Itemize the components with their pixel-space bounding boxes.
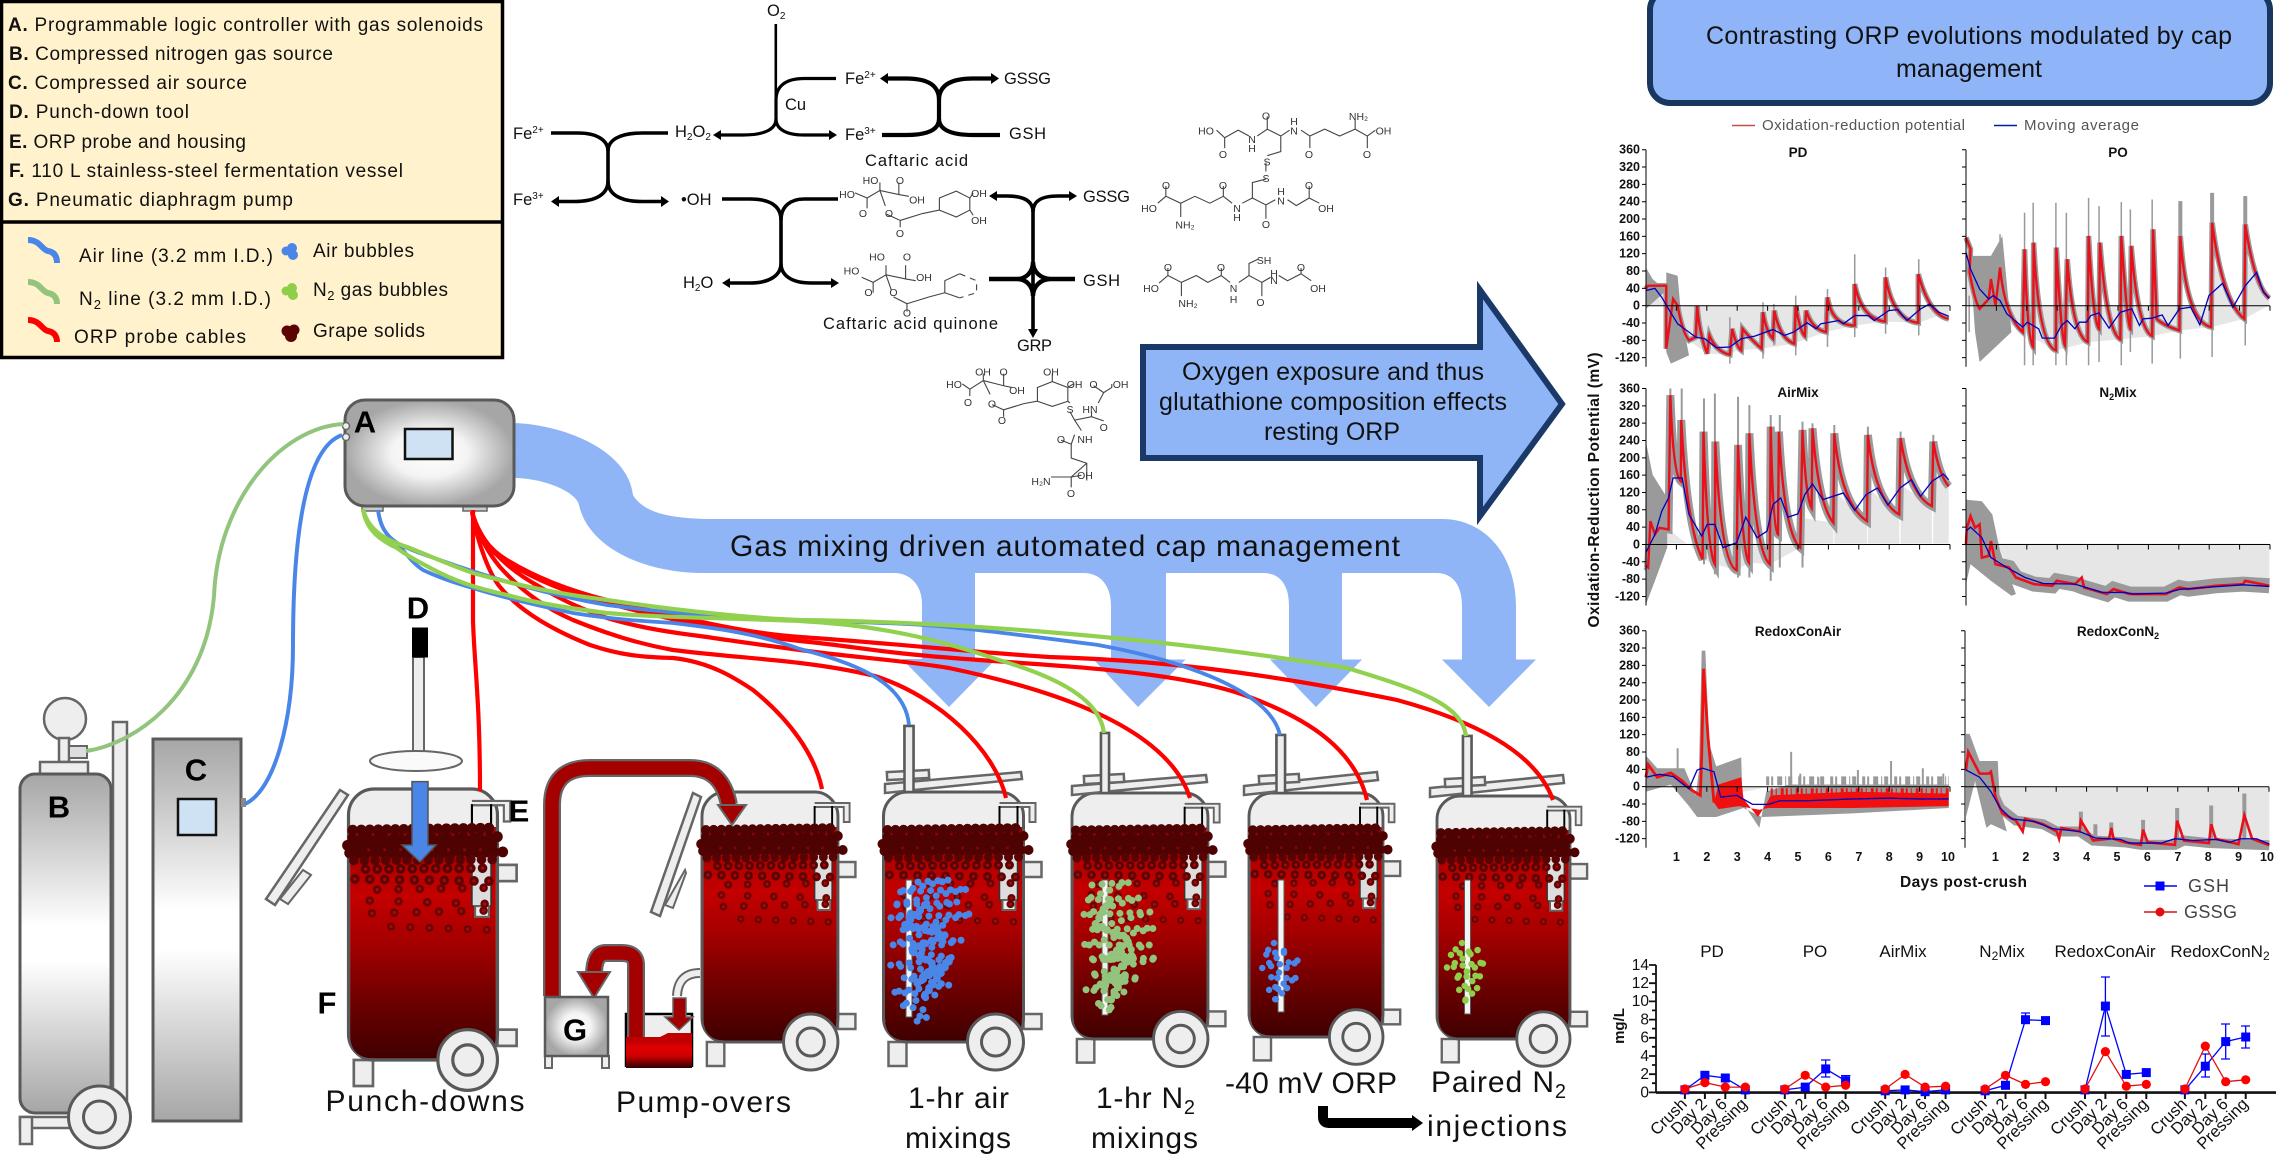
chart: RedoxConAir: 0 [1633, 780, 1640, 794]
panel: equipment key: F. 110 L stainless-steel fermentation vessel [9, 161, 403, 182]
label: 1-hr air mixings: mixings [905, 1122, 1011, 1155]
chart: RedoxConN2: 2 [2154, 631, 2159, 641]
chart: RedoxConAir: 40 [1626, 762, 1640, 776]
label: punch-downs: Punch-downs [326, 1085, 524, 1118]
panel: equipment key: B. Compressed nitrogen gas source [9, 44, 333, 65]
chart: N2Mix [1962, 385, 2270, 606]
chemistry: oxidation reaction scheme: Fe [513, 191, 532, 209]
chart: glutathione concentrations: 14 [1632, 957, 1649, 974]
molecule: grape reaction product GRP: OH [1009, 385, 1025, 397]
molecule: grape reaction product GRP: O [1089, 379, 1098, 391]
chart: N2Mix: N [2099, 385, 2109, 400]
label: -40 mV ORP: -40 mV ORP [1225, 1067, 1397, 1100]
molecule: grape reaction product GRP: O [1000, 367, 1008, 379]
chart: glutathione concentrations: Pressing [1794, 1095, 1852, 1153]
chart: RedoxConAir: 160 [1619, 710, 1640, 724]
molecule: glutathione disulfide GSSG: NH₂ [1175, 220, 1195, 232]
chart: glutathione concentrations: PO [1803, 942, 1827, 961]
molecule: caftaric acid quinone: O [903, 308, 911, 320]
chart: glutathione concentrations: Day 2 [1668, 1095, 1711, 1138]
chemistry: oxidation reaction scheme [513, 2, 1130, 355]
chemistry: oxidation reaction scheme: Caftaric acid quinone [823, 315, 998, 333]
chart: AirMix: 80 [1626, 503, 1640, 517]
molecule: grape reaction product GRP: HO [946, 379, 962, 391]
chart: glutathione concentrations: Day 6 [2089, 1095, 2132, 1138]
molecule: caftaric acid: HO [839, 189, 855, 201]
chart: RedoxConN2: 10 [2260, 850, 2274, 864]
chart: N2Mix: Mix [2114, 385, 2137, 400]
molecule: grape reaction product GRP: O [964, 397, 972, 409]
molecule: grape reaction product GRP: O [988, 399, 996, 411]
panel: equipment key: N [79, 289, 93, 310]
molecule: glutathione disulfide GSSG: S [1263, 157, 1271, 169]
chart: glutathione concentrations: mg/L [1611, 1008, 1628, 1044]
chemistry: oxidation reaction scheme: 2 [780, 11, 786, 22]
title: contrasting ORP evolutions: management [1896, 55, 2042, 83]
molecule: grape reaction product GRP: OH [1077, 470, 1093, 482]
molecule: caftaric acid: O [896, 228, 904, 240]
chart legend: GSH and GSSG: GSH [2188, 876, 2229, 896]
chemistry: oxidation reaction scheme: GSH [1083, 272, 1120, 290]
chart: PD: 240 [1619, 195, 1640, 209]
chemistry: oxidation reaction scheme: 3+ [864, 126, 876, 137]
molecule: grape reaction product GRP: HN [1082, 404, 1098, 416]
molecule: glutathione disulfide GSSG: O [1363, 149, 1371, 161]
molecule: reduced glutathione GSH: N [1270, 275, 1278, 287]
icon: punch-down tool D [370, 590, 462, 771]
arrow: oxygen exposure callout [1143, 290, 1562, 516]
chart: glutathione concentrations: Day 2 [1768, 1095, 1811, 1138]
chart: RedoxConAir: 240 [1619, 676, 1640, 690]
chemistry: oxidation reaction scheme: Fe [513, 125, 532, 143]
chart: glutathione concentrations: Pressing [1894, 1095, 1952, 1153]
chart: PD: 320 [1619, 160, 1640, 174]
chart: RedoxConN2: 9 [2235, 850, 2242, 864]
label: 1-hr air mixings: 1-hr air [908, 1082, 1009, 1115]
chart: RedoxConAir: 120 [1619, 728, 1640, 742]
molecule: caftaric acid quinone [844, 252, 977, 320]
label: 1-hr N2 mixings: mixings [1091, 1122, 1198, 1155]
chart: PO: PO [2108, 145, 2128, 160]
panel: equipment key: line (3.2 mm I.D.) [102, 289, 271, 310]
chart: PD: 120 [1619, 247, 1640, 261]
title: contrasting ORP evolutions [1650, 0, 2270, 103]
chart: glutathione concentrations: Day 6 [1888, 1095, 1931, 1138]
molecule: reduced glutathione GSH [1143, 255, 1326, 310]
chart: RedoxConAir: 9 [1916, 850, 1923, 864]
chart: glutathione concentrations: Pressing [2094, 1095, 2152, 1153]
chemistry: oxidation reaction scheme: 3+ [532, 191, 544, 202]
chart: RedoxConAir: 8 [1886, 850, 1893, 864]
chemistry: oxidation reaction scheme: Caftaric acid [865, 152, 968, 170]
molecule: glutathione disulfide GSSG: N [1290, 126, 1298, 138]
molecule: grape reaction product GRP: OH [975, 367, 991, 379]
vessel: pump-overs with pump G: G [563, 1012, 587, 1048]
arrow: oxygen exposure callout: resting ORP [1264, 418, 1400, 446]
chemistry: oxidation reaction scheme: 2 [687, 132, 693, 143]
chart: glutathione concentrations: 0 [1640, 1084, 1649, 1102]
chart: RedoxConAir: 5 [1795, 850, 1802, 864]
molecule: grape reaction product GRP [946, 367, 1128, 500]
chemistry: oxidation reaction scheme: Fe [845, 126, 864, 144]
chart: RedoxConAir: 3 [1734, 850, 1741, 864]
chart: PD: -40 [1622, 316, 1640, 330]
panel: equipment key: Air line (3.2 mm I.D.) [79, 246, 273, 267]
chemistry: oxidation reaction scheme: H [675, 123, 687, 141]
chart: RedoxConN2: 6 [2144, 850, 2151, 864]
chart: PD: 160 [1619, 229, 1640, 243]
molecule: grape reaction product GRP: OH [1113, 379, 1128, 391]
molecule: glutathione disulfide GSSG: O [1219, 149, 1227, 161]
molecule: glutathione disulfide GSSG: OH [1318, 203, 1334, 215]
chart: PD: -80 [1622, 333, 1640, 347]
molecule: glutathione disulfide GSSG: H [1277, 186, 1285, 198]
molecule: glutathione disulfide GSSG: O [1219, 180, 1227, 192]
vessel: punch-downs: F [318, 986, 336, 1020]
chemistry: oxidation reaction scheme: Fe [845, 70, 864, 88]
chart: RedoxConAir: 4 [1764, 850, 1771, 864]
chart: RedoxConAir: -40 [1622, 797, 1640, 811]
chart: glutathione concentrations: Day 2 [2068, 1095, 2111, 1138]
chart: glutathione concentrations: Mix [1998, 942, 2025, 961]
axis label: days post-crush: Days post-crush [1900, 874, 2027, 891]
chart: AirMix: 200 [1619, 451, 1640, 465]
molecule: glutathione disulfide GSSG: O [1305, 180, 1313, 192]
molecule: glutathione disulfide GSSG [1141, 110, 1391, 232]
panel: equipment key: A. Programmable logic controller with gas solenoids [8, 15, 483, 36]
chart: glutathione concentrations: RedoxConN [2170, 942, 2263, 961]
chemistry: oxidation reaction scheme: GSSG [1004, 70, 1051, 88]
molecule: reduced glutathione GSH: HO [1143, 283, 1159, 295]
chart: glutathione concentrations: Day 2 [1868, 1095, 1911, 1138]
molecule: glutathione disulfide GSSG: O [1305, 149, 1313, 161]
molecule: reduced glutathione GSH: N [1230, 283, 1237, 295]
icon: flow band gas mixing [513, 423, 1536, 707]
molecule: glutathione disulfide GSSG: H [1248, 143, 1256, 155]
molecule: caftaric acid: OH [971, 215, 987, 227]
icon: gas lines from sources to controller [86, 424, 343, 804]
molecule: reduced glutathione GSH: O [1297, 262, 1305, 274]
molecule: glutathione disulfide GSSG: N [1233, 203, 1241, 215]
panel: equipment key: gas bubbles [335, 280, 448, 301]
chemistry: oxidation reaction scheme: GRP [1017, 337, 1052, 355]
molecule: glutathione disulfide GSSG: HO [1141, 203, 1157, 215]
label: 1-hr N2 mixings [1091, 1082, 1198, 1155]
molecule: reduced glutathione GSH: SH [1257, 255, 1271, 267]
molecule: grape reaction product GRP: O [1057, 434, 1065, 446]
molecule: reduced glutathione GSH: OH [1310, 283, 1326, 295]
chart: glutathione concentrations: Day 6 [1989, 1095, 2032, 1138]
chart: N2Mix: 2 [2109, 392, 2114, 402]
chart: glutathione concentrations: 2 [1992, 949, 1999, 963]
vessel: punch-downs [266, 782, 529, 1090]
chart: glutathione concentrations: 2 [2263, 949, 2270, 963]
molecule: glutathione disulfide GSSG: O [1262, 219, 1270, 231]
panel: equipment key: 2 [327, 288, 334, 303]
chemistry: oxidation reaction scheme: O [767, 2, 780, 20]
chart: AirMix [1615, 382, 1950, 606]
chart: PD: 280 [1619, 177, 1640, 191]
chemistry: oxidation reaction scheme: GSSG [1083, 188, 1130, 206]
molecule: caftaric acid: OH [971, 188, 987, 200]
icon: punch-down tool D: D [407, 590, 429, 626]
molecule: reduced glutathione GSH: O [1217, 262, 1225, 274]
chart: glutathione concentrations: Day 6 [1789, 1095, 1832, 1138]
panel: equipment key: Grape solids [313, 321, 425, 342]
chemistry: oxidation reaction scheme: O [700, 274, 713, 292]
chart: PD: 0 [1633, 299, 1640, 313]
chart: PD: 360 [1619, 143, 1640, 157]
molecule: caftaric acid: HO [863, 175, 878, 187]
chart: AirMix: -120 [1615, 590, 1640, 604]
molecule: grape reaction product GRP: H₂N [1031, 476, 1051, 488]
icon: ORP probe cables [472, 510, 1553, 800]
chart: glutathione concentrations: 12 [1632, 975, 1649, 992]
panel: equipment key: C. Compressed air source [8, 73, 247, 94]
chart: RedoxConAir: RedoxConAir [1755, 624, 1842, 639]
vessel: 1-hr N2 mixings [1069, 733, 1225, 1067]
chemistry: oxidation reaction scheme: O [692, 123, 705, 141]
chart: AirMix: 240 [1619, 434, 1640, 448]
chart legend: ORP and moving average [1732, 117, 2139, 134]
chart: RedoxConAir: 1 [1673, 850, 1680, 864]
molecule: reduced glutathione GSH: H [1230, 294, 1237, 306]
chart legend: ORP and moving average: Oxidation-reduction potential [1762, 117, 1965, 134]
molecule: caftaric acid quinone: O [903, 252, 911, 264]
chart: PD: PD [1789, 145, 1808, 160]
chemistry: oxidation reaction scheme: Cu [785, 96, 806, 114]
chart: PD: 200 [1619, 212, 1640, 226]
chart: RedoxConN2: 8 [2205, 850, 2212, 864]
chart: AirMix: -80 [1622, 572, 1640, 586]
chemistry: oxidation reaction scheme: 2+ [864, 70, 876, 81]
chart: RedoxConN2: 1 [1992, 850, 1999, 864]
vessel: -40 mV ORP [1244, 735, 1400, 1064]
chart: RedoxConN2: 3 [2053, 850, 2060, 864]
chart: RedoxConN2: 5 [2114, 850, 2121, 864]
chart: glutathione concentrations: AirMix [1879, 942, 1927, 961]
chart: PD: -120 [1615, 351, 1640, 365]
title: contrasting ORP evolutions: Contrasting ORP evolutions modulated by cap [1706, 22, 2232, 50]
chart: RedoxConAir: -120 [1615, 832, 1640, 846]
arrow: ORP trigger to paired injections [1323, 1106, 1423, 1131]
chart: RedoxConN2: RedoxConN [2077, 624, 2154, 639]
chart: glutathione concentrations: Day 2 [1969, 1095, 2012, 1138]
chart: RedoxConAir: 280 [1619, 658, 1640, 672]
chart: AirMix: 40 [1626, 520, 1640, 534]
vessel: paired N2 injections [1430, 736, 1587, 1066]
molecule: glutathione disulfide GSSG: N [1277, 196, 1285, 208]
molecule: grape reaction product GRP: NH [1077, 434, 1093, 446]
chart: glutathione concentrations: Crush [2047, 1095, 2091, 1139]
chart: RedoxConAir: 6 [1825, 850, 1832, 864]
molecule: caftaric acid: O [885, 208, 893, 220]
chart: glutathione concentrations: 6 [1640, 1030, 1649, 1046]
molecule: grape reaction product GRP: O [1100, 422, 1108, 434]
chart: glutathione concentrations: N [1979, 942, 1992, 961]
label: 1-hr air mixings [905, 1082, 1011, 1155]
chart: RedoxConN2: 7 [2174, 850, 2181, 864]
chart: RedoxConN2: 4 [2083, 850, 2090, 864]
axis label: oxidation-reduction potential: Oxidation-Reduction Potential (mV) [1586, 352, 1603, 628]
panel: equipment key: Air bubbles [313, 241, 414, 262]
chart: glutathione concentrations: PD [1700, 942, 1724, 961]
chart: glutathione concentrations: RedoxConAir [2054, 942, 2156, 961]
chart: glutathione concentrations: Crush [1847, 1095, 1891, 1139]
label: 1-hr N2 mixings: 2 [1184, 1097, 1195, 1119]
chart: RedoxConAir: 7 [1855, 850, 1862, 864]
icon: nitrogen cylinder B: B [48, 790, 70, 824]
icon: programmable logic controller A [342, 400, 514, 511]
chart: RedoxConAir: 10 [1941, 850, 1955, 864]
chart: glutathione concentrations: Day 6 [2189, 1095, 2232, 1138]
vessel: 1-hr air mixings [880, 726, 1042, 1070]
chart: PD [1615, 143, 1950, 367]
chart legend: GSH and GSSG: GSSG [2184, 902, 2237, 922]
molecule: caftaric acid quinone: OH [916, 272, 932, 284]
molecule: caftaric acid: OH [909, 194, 925, 206]
chart: PD: 80 [1626, 264, 1640, 278]
label: pump-overs: Pump-overs [616, 1086, 791, 1119]
molecule: caftaric acid: O [896, 175, 904, 187]
panel: equipment key [0, 2, 503, 358]
chart: AirMix: 320 [1619, 399, 1640, 413]
icon: compressed air source C [153, 739, 246, 1121]
heading: gas mixing driven automated cap management: Gas mixing driven automated cap management [730, 530, 1401, 563]
label: 1-hr N2 mixings: 1-hr N [1096, 1082, 1183, 1115]
chart: glutathione concentrations: Crush [1947, 1095, 1991, 1139]
molecule: reduced glutathione GSH: H [1270, 268, 1278, 280]
arrow: oxygen exposure callout: glutathione composition effects [1159, 388, 1507, 416]
chart: glutathione concentrations: 10 [1632, 993, 1649, 1010]
chart: RedoxConAir [1615, 624, 1955, 864]
chart legend: ORP and moving average: Moving average [2024, 117, 2139, 134]
molecule: grape reaction product GRP: O [1067, 488, 1075, 500]
chemistry: oxidation reaction scheme: 2+ [532, 125, 544, 136]
icon: nitrogen lines to vessels [363, 509, 1466, 736]
label: paired N2 injections: Paired N [1431, 1066, 1554, 1099]
chart: glutathione concentrations: Crush [1647, 1095, 1691, 1139]
icon: compressed air source C: C [185, 752, 207, 788]
molecule: glutathione disulfide GSSG: O [1162, 180, 1170, 192]
chemistry: oxidation reaction scheme: 2 [695, 283, 701, 294]
chart: glutathione concentrations: Crush [1747, 1095, 1791, 1139]
chart: PO [1962, 145, 2270, 367]
chemistry: oxidation reaction scheme: GSH [1009, 125, 1046, 143]
molecule: grape reaction product GRP: OH [1067, 379, 1082, 391]
molecule: glutathione disulfide GSSG: S [1262, 173, 1270, 185]
panel: equipment key: G. Pneumatic diaphragm pump [8, 190, 293, 211]
panel: equipment key: D. Punch-down tool [9, 102, 189, 123]
chart: RedoxConN2 [1961, 624, 2274, 864]
molecule: glutathione disulfide GSSG: NH₂ [1349, 111, 1368, 123]
molecule: reduced glutathione GSH: O [1256, 297, 1265, 309]
chemistry: oxidation reaction scheme: H [683, 274, 695, 292]
molecule: reduced glutathione GSH: NH₂ [1178, 298, 1198, 310]
chart: PD: 40 [1626, 281, 1640, 295]
panel: equipment key: E. ORP probe and housing [9, 132, 246, 153]
chart: RedoxConN2: 2 [2022, 850, 2029, 864]
chart: RedoxConAir: 200 [1619, 693, 1640, 707]
chart: RedoxConAir: 360 [1619, 624, 1640, 638]
chart: glutathione concentrations: Crush [2147, 1095, 2191, 1139]
molecule: caftaric acid [839, 175, 987, 240]
icon: programmable logic controller A: A [354, 404, 376, 440]
molecule: glutathione disulfide GSSG: OH [1376, 126, 1391, 138]
label: paired N2 injections [1427, 1066, 1567, 1143]
chart: glutathione concentrations: Day 6 [1688, 1095, 1731, 1138]
molecule: glutathione disulfide GSSG: HO [1198, 126, 1214, 138]
chart: RedoxConAir: -80 [1622, 814, 1640, 828]
molecule: caftaric acid: O [859, 208, 867, 220]
chart: RedoxConAir: 2 [1703, 850, 1710, 864]
chart: AirMix: 160 [1619, 468, 1640, 482]
chart: AirMix: AirMix [1777, 385, 1819, 400]
icon: nitrogen cylinder B [20, 698, 130, 1148]
chart: glutathione concentrations: Day 2 [2168, 1095, 2211, 1138]
chart: AirMix: 120 [1619, 486, 1640, 500]
molecule: grape reaction product GRP: S [1066, 404, 1074, 416]
label: paired N2 injections: 2 [1555, 1081, 1566, 1103]
chart: AirMix: 0 [1633, 538, 1640, 552]
molecule: caftaric acid quinone: O [864, 287, 872, 299]
molecule: caftaric acid quinone: HO [869, 252, 885, 264]
panel: equipment key: N [313, 280, 327, 301]
label: paired N2 injections: injections [1427, 1110, 1567, 1143]
chart: AirMix: -40 [1622, 555, 1640, 569]
molecule: glutathione disulfide GSSG: H [1233, 212, 1241, 224]
chart: AirMix: 280 [1619, 416, 1640, 430]
chemistry: oxidation reaction scheme: 2 [705, 132, 711, 143]
chart: glutathione concentrations: Pressing [1994, 1095, 2052, 1153]
chart: glutathione concentrations: 8 [1640, 1012, 1649, 1028]
panel: equipment key: 2 [94, 297, 101, 312]
chart: glutathione concentrations: 2 [1640, 1066, 1649, 1083]
molecule: grape reaction product GRP: OH [1043, 367, 1059, 379]
vessel: punch-downs: E [509, 794, 529, 828]
chart: glutathione concentrations: Pressing [1693, 1095, 1751, 1153]
chart: AirMix: 360 [1619, 382, 1640, 396]
icon: air lines to vessels [378, 510, 1280, 735]
molecule: caftaric acid quinone: HO [844, 266, 859, 278]
chart legend: GSH and GSSG [2144, 876, 2237, 922]
molecule: reduced glutathione GSH: O [1164, 262, 1172, 274]
arrow: oxygen exposure callout: Oxygen exposure and thus [1182, 358, 1484, 386]
chart: RedoxConAir: 80 [1626, 745, 1640, 759]
panel: equipment key: ORP probe cables [74, 327, 246, 348]
molecule: glutathione disulfide GSSG: O [1262, 110, 1270, 122]
chart: glutathione concentrations: Pressing [2194, 1095, 2252, 1153]
molecule: glutathione disulfide GSSG: H [1290, 116, 1298, 128]
chart: RedoxConAir: 320 [1619, 641, 1640, 655]
chemistry: oxidation reaction scheme: •OH [681, 191, 712, 209]
molecule: glutathione disulfide GSSG: N [1248, 134, 1256, 146]
chart: glutathione concentrations: 4 [1640, 1048, 1649, 1065]
molecule: grape reaction product GRP: O [998, 415, 1006, 427]
chart: glutathione concentrations [1611, 942, 2276, 1153]
vessel: pump-overs with pump G [545, 768, 855, 1070]
molecule: caftaric acid quinone: O [889, 287, 898, 299]
